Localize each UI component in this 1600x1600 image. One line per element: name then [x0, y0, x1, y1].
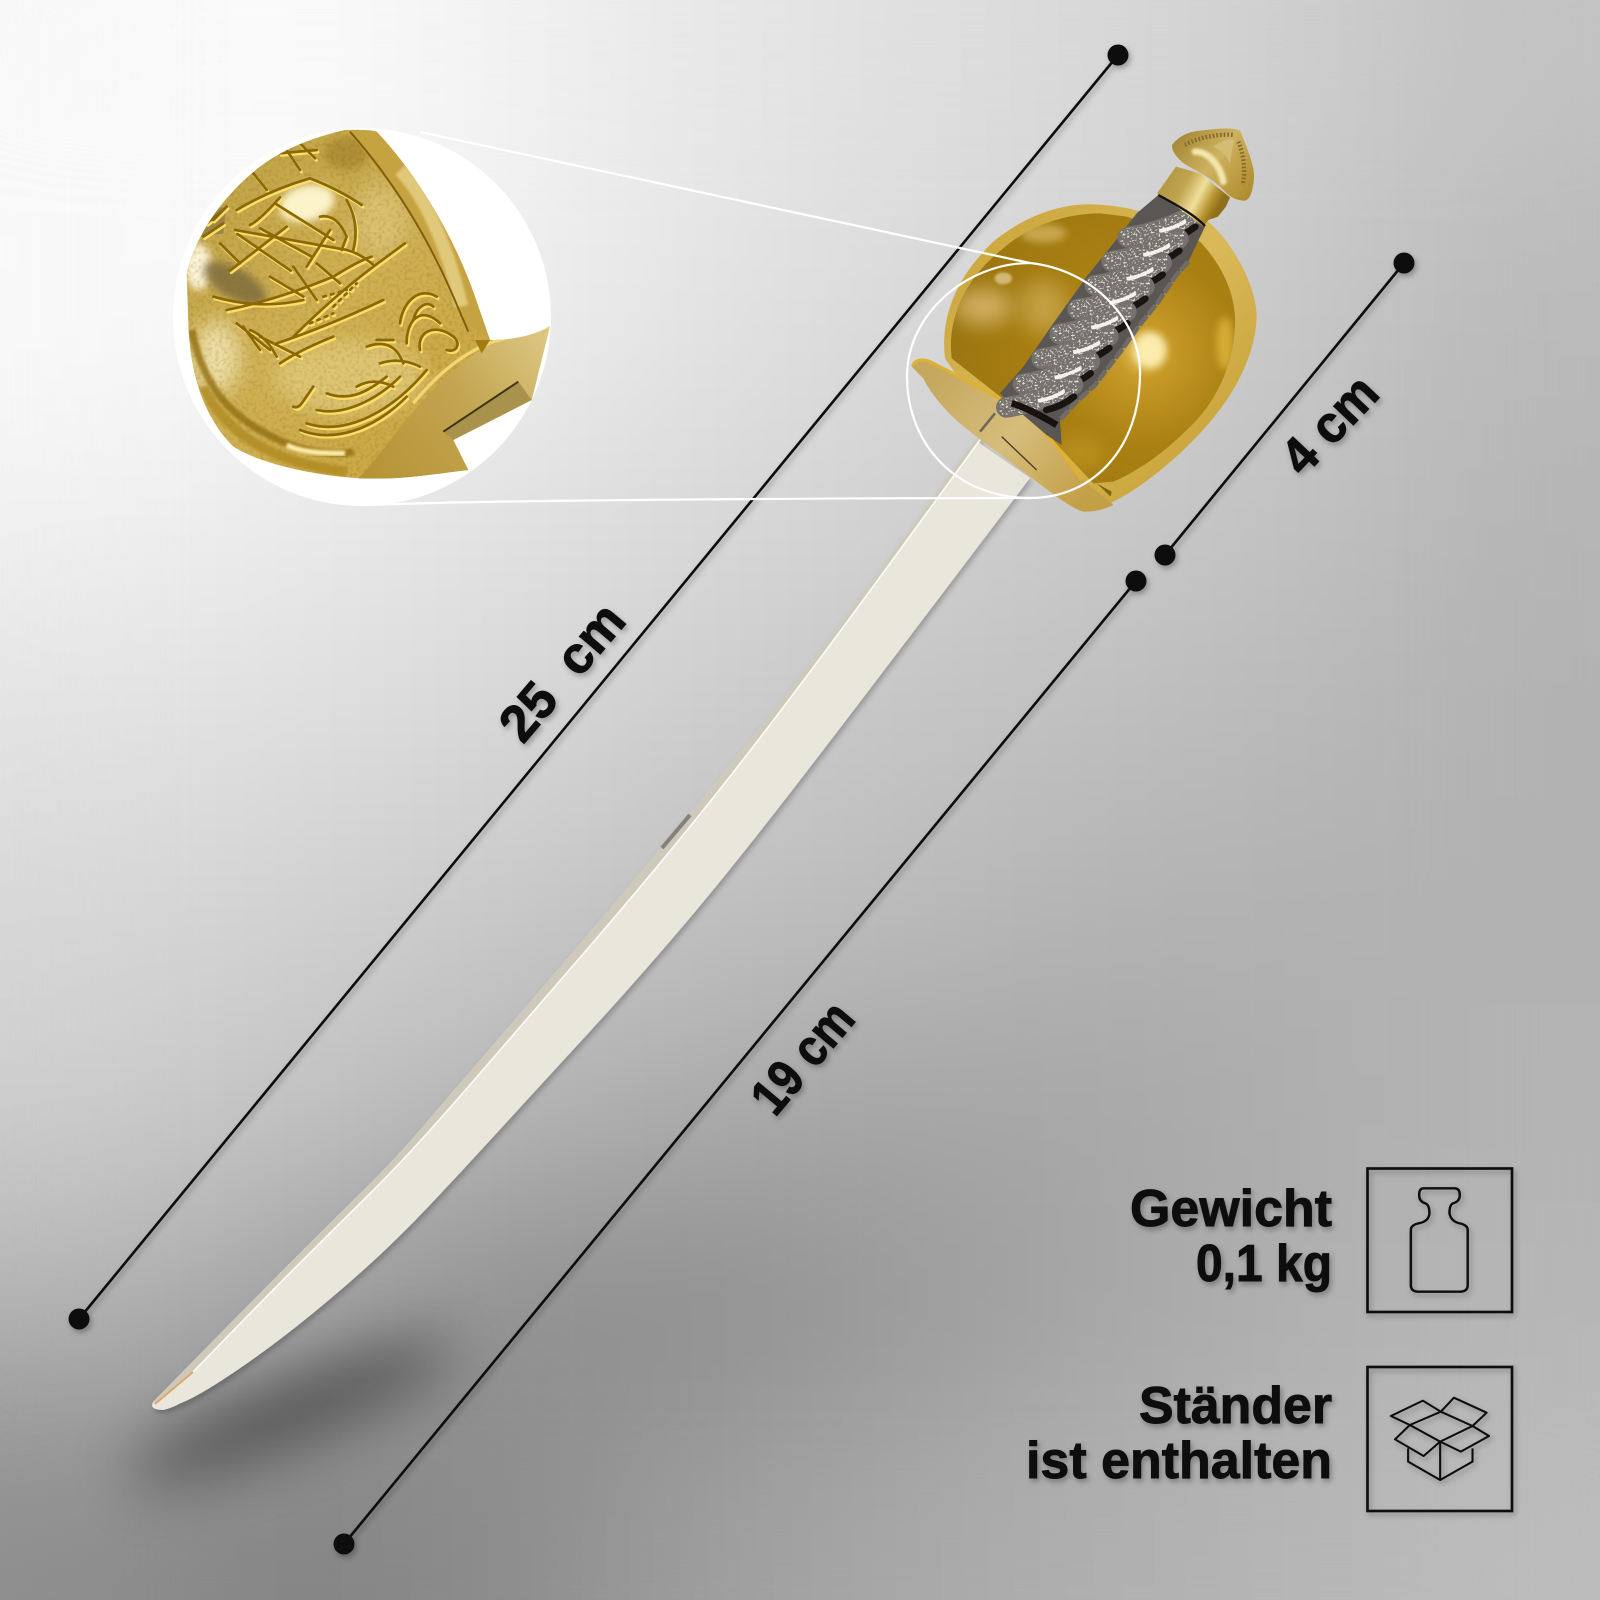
sword drop shadow: [119, 1319, 465, 1505]
info: weight label: Gewicht: [1130, 1180, 1332, 1238]
dimension: guard width 4 cm: [1154, 252, 1414, 566]
info: stand included label: ist enthalten: [1026, 1432, 1332, 1490]
guard plate detail: [357, 326, 550, 480]
engraved ship and waves: [205, 145, 459, 437]
lens gold engraving photo: [186, 130, 550, 479]
dimension: guard width 4 cm: 4 cm: [1270, 364, 1390, 486]
rope grip: [1000, 195, 1205, 445]
guard plate: [912, 359, 1113, 512]
dimension: blade length 19 cm: 19 cm: [740, 990, 866, 1126]
shell guard rim: [944, 204, 1257, 509]
lens white circle: [173, 128, 551, 506]
info: weight label: [1130, 1180, 1332, 1293]
sword: [152, 129, 1257, 1410]
lower rim: [192, 330, 353, 453]
sword blade: [152, 433, 1030, 1410]
dimension: total length 25 cm: 25 cm: [488, 592, 637, 753]
dimension: blade length 19 cm: [334, 570, 1146, 1554]
info: stand included label: [1026, 1377, 1332, 1490]
dimension: total length 25 cm: [68, 44, 1128, 1330]
magnified detail lens: [173, 123, 560, 506]
info: stand included label: Ständer: [1139, 1377, 1332, 1435]
rim band: [345, 130, 490, 340]
zoom connector and highlight outline: [372, 132, 1140, 505]
info: weight label: 0,1 kg: [1196, 1235, 1332, 1293]
pommel: [1157, 129, 1254, 227]
icon: weight in frame: [1368, 1168, 1512, 1312]
ship sail highlight: [275, 178, 339, 228]
shell guard bowl: [951, 213, 1235, 483]
hull hatch shadow: [198, 257, 270, 310]
sword hilt: [912, 129, 1257, 512]
icon: open box in frame: [1368, 1367, 1512, 1511]
